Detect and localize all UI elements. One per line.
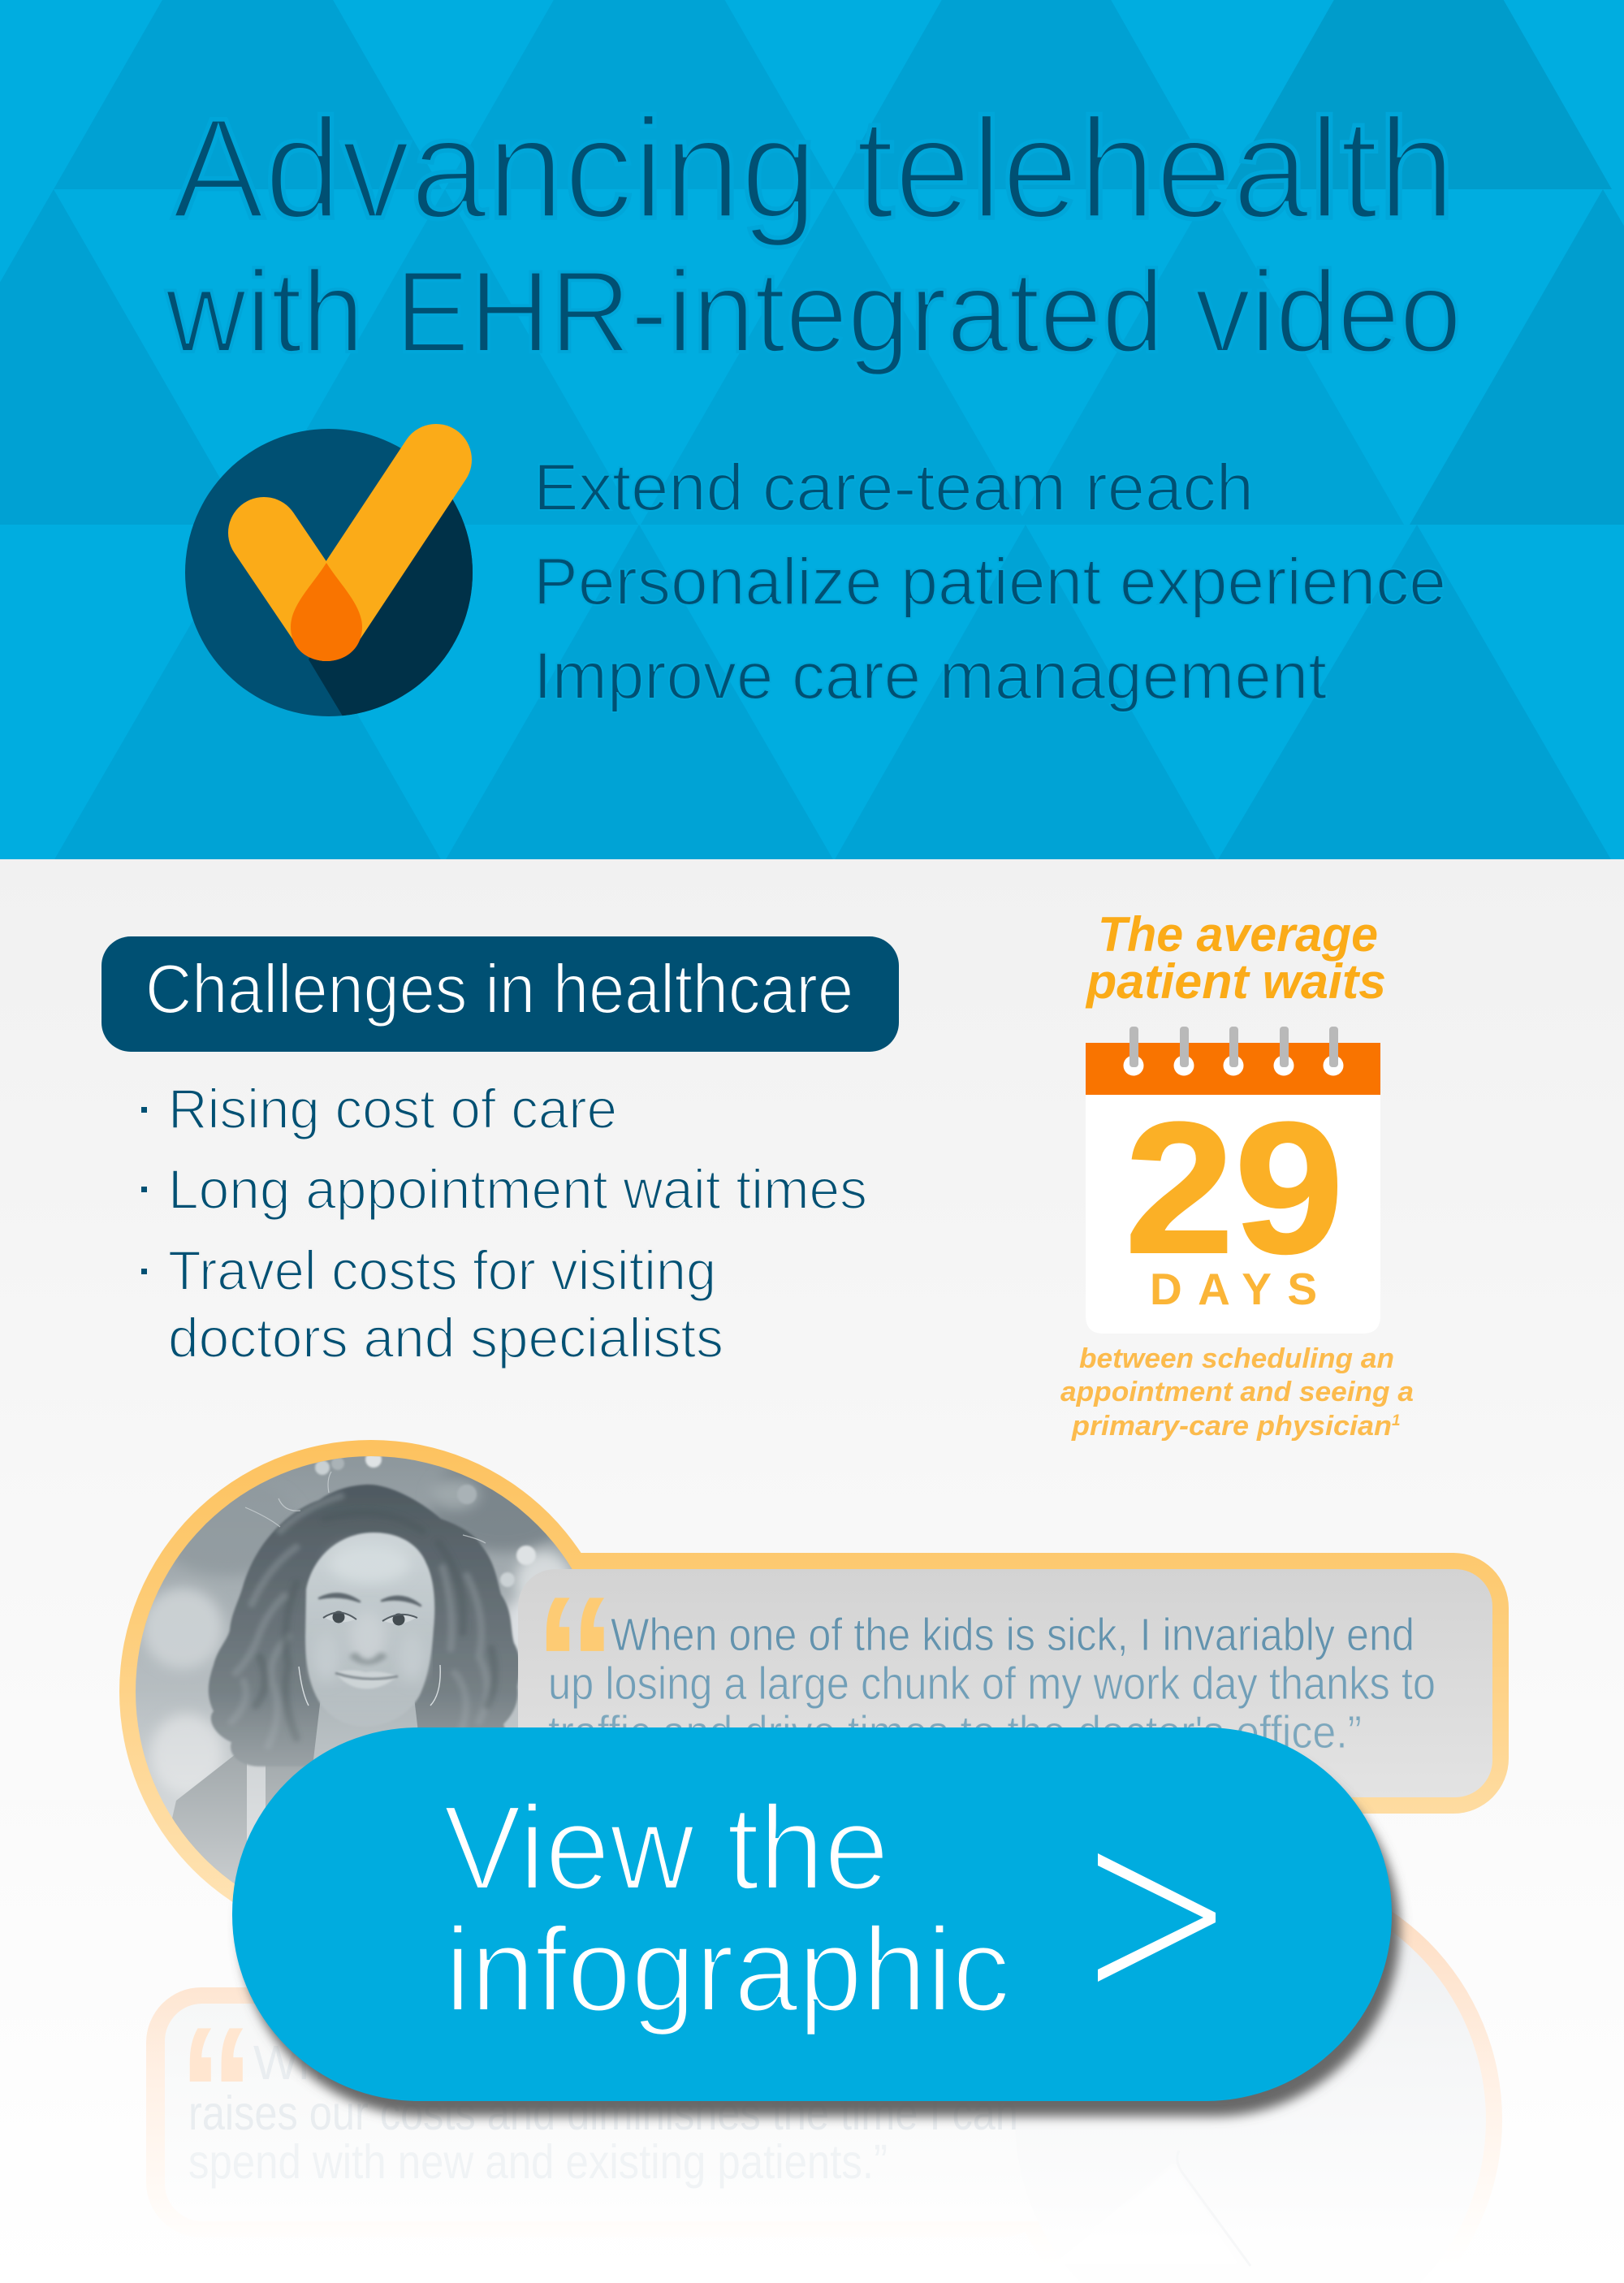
faded quote box — [165, 2004, 1074, 2221]
patient testimonial — [119, 1440, 1509, 1949]
testimonial frame — [119, 1440, 1509, 1944]
faded quote text: raises our costs and diminishes the time I can — [188, 2086, 1018, 2140]
stat caption: 1 — [1392, 1412, 1401, 1429]
button label: infographic — [445, 1903, 1010, 2037]
stat caption: between scheduling an — [1079, 1343, 1394, 1374]
benefits list: Improve care management — [533, 639, 1327, 713]
title: with EHR-integrated video — [165, 248, 1462, 377]
heading: challenges in healthcare: Challenges in healthcare — [145, 951, 853, 1028]
quote text: When one of the kids is sick, I invariably end — [611, 1609, 1415, 1661]
title: Advancing telehealth — [172, 89, 1455, 249]
shoulders — [172, 1756, 305, 1884]
stat caption: primary-care physician — [1071, 1411, 1392, 1442]
stat heading: The average — [1098, 907, 1378, 962]
stat heading: patient waits — [1085, 954, 1386, 1009]
page background — [0, 859, 1624, 2283]
quote text: traffic and drive times to the doctor's office.” — [548, 1706, 1362, 1758]
icon: calendar — [1086, 1027, 1380, 1334]
hair texture — [231, 1496, 495, 1746]
header triangle pattern — [0, 0, 1624, 861]
number: 29: 29 — [1125, 1083, 1344, 1292]
faded frame — [146, 1868, 1502, 2283]
faded quote mark: “ — [179, 1988, 254, 2199]
button label — [443, 1781, 1010, 2037]
stat caption — [1060, 1343, 1414, 1442]
hair — [209, 1485, 520, 1766]
quote mark: “ — [534, 1558, 616, 1768]
challenges list: doctors and specialists — [168, 1307, 723, 1369]
stat caption: appointment and seeing a — [1060, 1377, 1414, 1407]
benefits list: Extend care-team reach — [533, 451, 1254, 525]
faded quote text: spend with new and existing patients.” — [188, 2135, 888, 2189]
icon: check mark badge — [185, 429, 487, 727]
header panel — [0, 0, 1624, 861]
button label: View the — [443, 1781, 889, 1915]
quote text: up losing a large chunk of my work day thanks to — [548, 1658, 1436, 1710]
heading: challenges in healthcare — [102, 936, 899, 1052]
benefits list: Personalize patient experience — [533, 545, 1446, 619]
flyaway strands — [245, 1472, 486, 1543]
title — [165, 89, 1462, 377]
challenges list: Long appointment wait times — [168, 1158, 867, 1221]
faded testimonial — [146, 1868, 1502, 2283]
photo: patient portrait — [136, 1456, 572, 1884]
icon: arrow — [1098, 1853, 1216, 1982]
faded quote text: When — [253, 2036, 378, 2090]
stat: average patient wait — [1060, 907, 1414, 1442]
benefits list — [533, 451, 1446, 713]
facial features — [319, 1593, 421, 1688]
challenges list: Rising cost of care — [168, 1078, 617, 1140]
challenges list — [141, 1078, 867, 1369]
neck — [313, 1701, 417, 1760]
challenges list: Travel costs for visiting — [168, 1239, 716, 1302]
stat heading — [1085, 907, 1386, 1009]
quote text — [548, 1609, 1436, 1758]
button: view the infographic — [232, 1727, 1400, 2117]
quote box — [518, 1569, 1492, 1797]
faded quote text — [188, 2036, 1018, 2189]
faded photo — [1015, 1884, 1486, 2283]
face — [305, 1533, 434, 1727]
label: days: DAYS — [1150, 1264, 1317, 1314]
earrings — [299, 1665, 440, 1706]
